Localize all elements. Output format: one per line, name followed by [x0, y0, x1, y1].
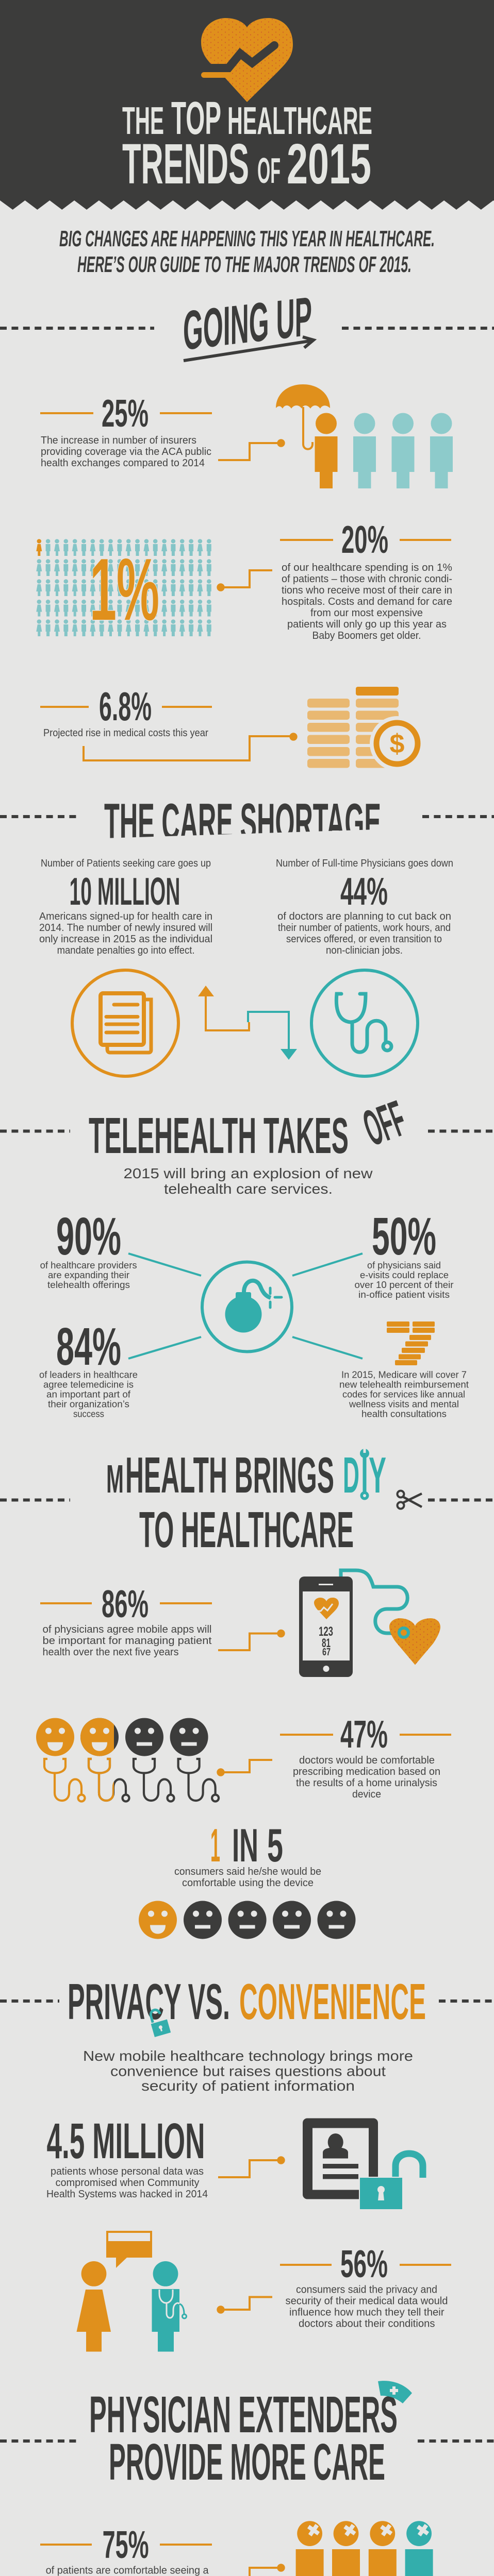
- connector: [217, 2297, 272, 2314]
- stat: 4.5 million: compromised when Community: [56, 2177, 199, 2189]
- column: physicians: non-clinician jobs.: [326, 945, 403, 956]
- chart: 1% people grid: 1%: [90, 540, 159, 639]
- stat: 47%: doctors would be comfortable: [299, 1755, 435, 1766]
- stat: 25%: 25%: [102, 392, 149, 435]
- medicare text: [339, 1369, 469, 1419]
- icon: small padlock: [147, 2007, 171, 2038]
- stat: 20%: hospitals. Costs and demand for care: [282, 596, 452, 607]
- stat: 1 in 5: IN: [232, 1820, 258, 1872]
- stat: 4.5 million: Health Systems was hacked in 2014: [46, 2189, 208, 2200]
- medicare text: In 2015, Medicare will cover 7: [341, 1369, 467, 1380]
- icon row: patients with bandages: [296, 2521, 433, 2576]
- arrow: patients up, physicians down: [198, 986, 297, 1060]
- icon: documents in circle: [72, 970, 178, 1076]
- icon: smartphone with heart monitor: 81: [322, 1636, 331, 1650]
- privacy intro: convenience but raises questions about: [110, 2063, 386, 2079]
- column: patients: mandate penalties go into effect.: [57, 945, 195, 956]
- medicare text: wellness visits and mental: [349, 1399, 459, 1410]
- telehealth intro: telehealth care services.: [164, 1181, 333, 1197]
- stat: 1 in 5: 5: [267, 1820, 283, 1872]
- stat: 90%: are expanding their: [48, 1270, 129, 1280]
- title: 2015: [287, 132, 371, 196]
- stat: 84%: success: [73, 1409, 104, 1419]
- stat: 50%: over 10 percent of their: [355, 1280, 454, 1290]
- icon row: five faces: [139, 1901, 356, 1939]
- stat: 90%: [40, 1207, 137, 1290]
- stat: 86%: of physicians agree mobile apps will: [42, 1624, 211, 1635]
- icon: coin stacks: [307, 687, 424, 771]
- stat: 1 in 5: consumers said he/she would be: [174, 1866, 321, 1877]
- icon: nurse cap on heading: [378, 2381, 412, 2403]
- stat: 25%: The increase in number of insurers: [41, 435, 196, 446]
- stat: 84%: an important part of: [46, 1389, 131, 1399]
- title: OF: [257, 150, 281, 191]
- stat: 90%: telehealth offerings: [47, 1280, 130, 1290]
- stat: 50%: in-office patient visits: [358, 1290, 450, 1300]
- column: physicians: [276, 858, 453, 956]
- stat: 6.8%: Projected rise in medical costs this year: [43, 727, 208, 739]
- stat: 56%: security of their medical data would: [286, 2296, 448, 2307]
- stat: 84%: of leaders in healthcare: [39, 1369, 138, 1380]
- stat: 86%: be important for managing patient: [42, 1635, 212, 1647]
- heading: telehealth takes off: [0, 1090, 494, 1164]
- stat: 56%: consumers said the privacy and: [296, 2284, 437, 2296]
- stat: 90%: 90%: [56, 1207, 121, 1266]
- stat: 56%: 56%: [340, 2242, 388, 2285]
- heading: mhealth brings diy: [0, 1447, 494, 1558]
- stat: 50%: [355, 1207, 454, 1300]
- icon: heart with pulse: [199, 18, 293, 102]
- title: [122, 93, 372, 196]
- icon: seven from stacked bars: [387, 1321, 435, 1365]
- connector: [218, 2564, 285, 2576]
- stat: 86%: 86%: [102, 1582, 149, 1625]
- heading: privacy vs convenience: PRIVACY VS.: [68, 1973, 230, 2030]
- intro text: [59, 227, 435, 277]
- stat: 50%: of physicians said: [367, 1260, 441, 1270]
- icon: stethoscope in circle: [311, 970, 418, 1076]
- stat: 25%: [40, 392, 212, 469]
- stat: 4.5 million: 4.5 MILLION: [46, 2113, 205, 2169]
- icon: telehealth bomb with spokes: [128, 1253, 363, 1359]
- title: TOP: [171, 93, 221, 144]
- stat: 1 in 5: comfortable using the device: [182, 1877, 314, 1889]
- header band: [0, 0, 494, 210]
- privacy intro: New mobile healthcare technology brings more: [83, 2048, 413, 2064]
- connector: [218, 2156, 285, 2177]
- stat: 86%: health over the next five years: [42, 1647, 178, 1658]
- stat: 50%: e-visits could replace: [360, 1270, 449, 1280]
- heading: mhealth brings diy: M: [106, 1457, 124, 1501]
- icon: smartphone with heart monitor: [299, 1570, 440, 1677]
- stat: 84%: [39, 1317, 138, 1419]
- connector: [218, 1630, 285, 1650]
- stat: 47%: [280, 1713, 451, 1800]
- stat: 75%: [40, 2523, 212, 2576]
- title: TRENDS: [122, 132, 249, 196]
- title: HEALTHCARE: [227, 99, 372, 142]
- heading: privacy vs convenience: [0, 1973, 494, 2030]
- icon: coin stacks: $: [390, 729, 405, 759]
- stat: 47%: device: [352, 1789, 381, 1800]
- privacy intro: [83, 2048, 413, 2094]
- column: physicians: 44%: [340, 870, 388, 913]
- chart: 1% people grid: [35, 538, 211, 639]
- column: patients: Americans signed-up for health care in: [39, 911, 212, 922]
- heading: going up: GOING UP: [183, 285, 312, 362]
- stat: 75%: 75%: [103, 2523, 149, 2566]
- icon: smartphone with heart monitor: 67: [322, 1647, 331, 1658]
- privacy intro: security of patient information: [141, 2078, 355, 2094]
- column: physicians: services offered, or even transition to: [286, 934, 442, 945]
- connector: [84, 733, 298, 760]
- stat: 25%: providing coverage via the ACA public: [41, 446, 211, 457]
- connector: [217, 1760, 272, 1776]
- column: patients: Number of Patients seeking care goes up: [41, 858, 211, 869]
- stat: 47%: the results of a home urinalysis: [296, 1777, 437, 1789]
- stat: 20%: of our healthcare spending is on 1%: [282, 562, 452, 573]
- stat: 84%: 84%: [56, 1317, 121, 1376]
- icon: smartphone with heart monitor: 123: [319, 1624, 333, 1639]
- telehealth intro: 2015 will bring an explosion of new: [124, 1165, 373, 1181]
- connector: [217, 570, 272, 591]
- column: patients: [39, 858, 212, 956]
- stat: 20%: [280, 518, 452, 641]
- column: patients: 10 MILLION: [69, 870, 180, 913]
- stat: 20%: tions who receive most of their care in: [282, 585, 452, 596]
- stat: 86%: [40, 1582, 212, 1658]
- stat: 20%: from our most expensive: [310, 607, 423, 619]
- column: physicians: of doctors are planning to cut back on: [277, 911, 451, 922]
- stat: 4.5 million: patients whose personal data was: [51, 2166, 204, 2177]
- column: physicians: Number of Full-time Physicians goes down: [276, 858, 453, 869]
- heading: telehealth takes off: OFF: [356, 1090, 413, 1157]
- stat: 20%: of patients – those with chronic condi-: [282, 573, 452, 585]
- stat: 50%: 50%: [372, 1207, 436, 1266]
- stat: 25%: health exchanges compared to 2014: [41, 457, 205, 469]
- telehealth intro: [124, 1165, 373, 1197]
- stat: 56%: [280, 2242, 451, 2330]
- stat: 47%: prescribing medication based on: [293, 1766, 440, 1777]
- icon: scissors: [397, 1491, 422, 1509]
- stat: 6.8%: 6.8%: [99, 684, 152, 729]
- stat: 20%: Baby Boomers get older.: [312, 630, 421, 641]
- medicare text: health consultations: [361, 1409, 447, 1419]
- column: patients: only increase in 2015 as the individual: [39, 934, 212, 945]
- title: THE: [122, 99, 164, 142]
- icon row: four doctor faces: [36, 1718, 219, 1801]
- heading: going up: [0, 285, 494, 362]
- heading: physician extenders: [0, 2386, 494, 2491]
- stat: 56%: influence how much they tell their: [289, 2307, 444, 2318]
- stat: 20%: patients will only go up this year as: [287, 619, 447, 630]
- icon: patient talking to doctor: [76, 2232, 187, 2351]
- connector: [218, 439, 285, 460]
- stat: 6.8%: [40, 684, 212, 739]
- stat: 90%: of healthcare providers: [40, 1260, 137, 1270]
- stat: 75%: of patients are comfortable seeing a: [46, 2565, 209, 2576]
- medicare text: codes for services like annual: [342, 1389, 465, 1399]
- stat: 1 in 5: [174, 1820, 321, 1889]
- column: physicians: their number of patients, work hours, and: [278, 922, 451, 934]
- icon: wrench: [360, 1448, 369, 1500]
- medicare text: new telehealth reimbursement: [339, 1380, 469, 1390]
- stat: 84%: their organization’s: [48, 1399, 129, 1410]
- heading: mhealth brings diy: D: [343, 1447, 359, 1503]
- heading: mhealth brings diy: Y: [369, 1447, 386, 1503]
- icon: patient record with open lock: [303, 2119, 423, 2210]
- stat: 1 in 5: 1: [210, 1820, 220, 1872]
- stat: 56%: doctors about their conditions: [299, 2318, 435, 2330]
- stat: 47%: 47%: [340, 1713, 388, 1756]
- column: patients: 2014. The number of newly insured will: [39, 922, 212, 934]
- stat: 20%: 20%: [341, 518, 388, 561]
- stat: 84%: agree telemedicine is: [43, 1380, 134, 1390]
- stat: 4.5 million: [46, 2113, 208, 2200]
- icon: umbrella and insured people: [276, 384, 453, 488]
